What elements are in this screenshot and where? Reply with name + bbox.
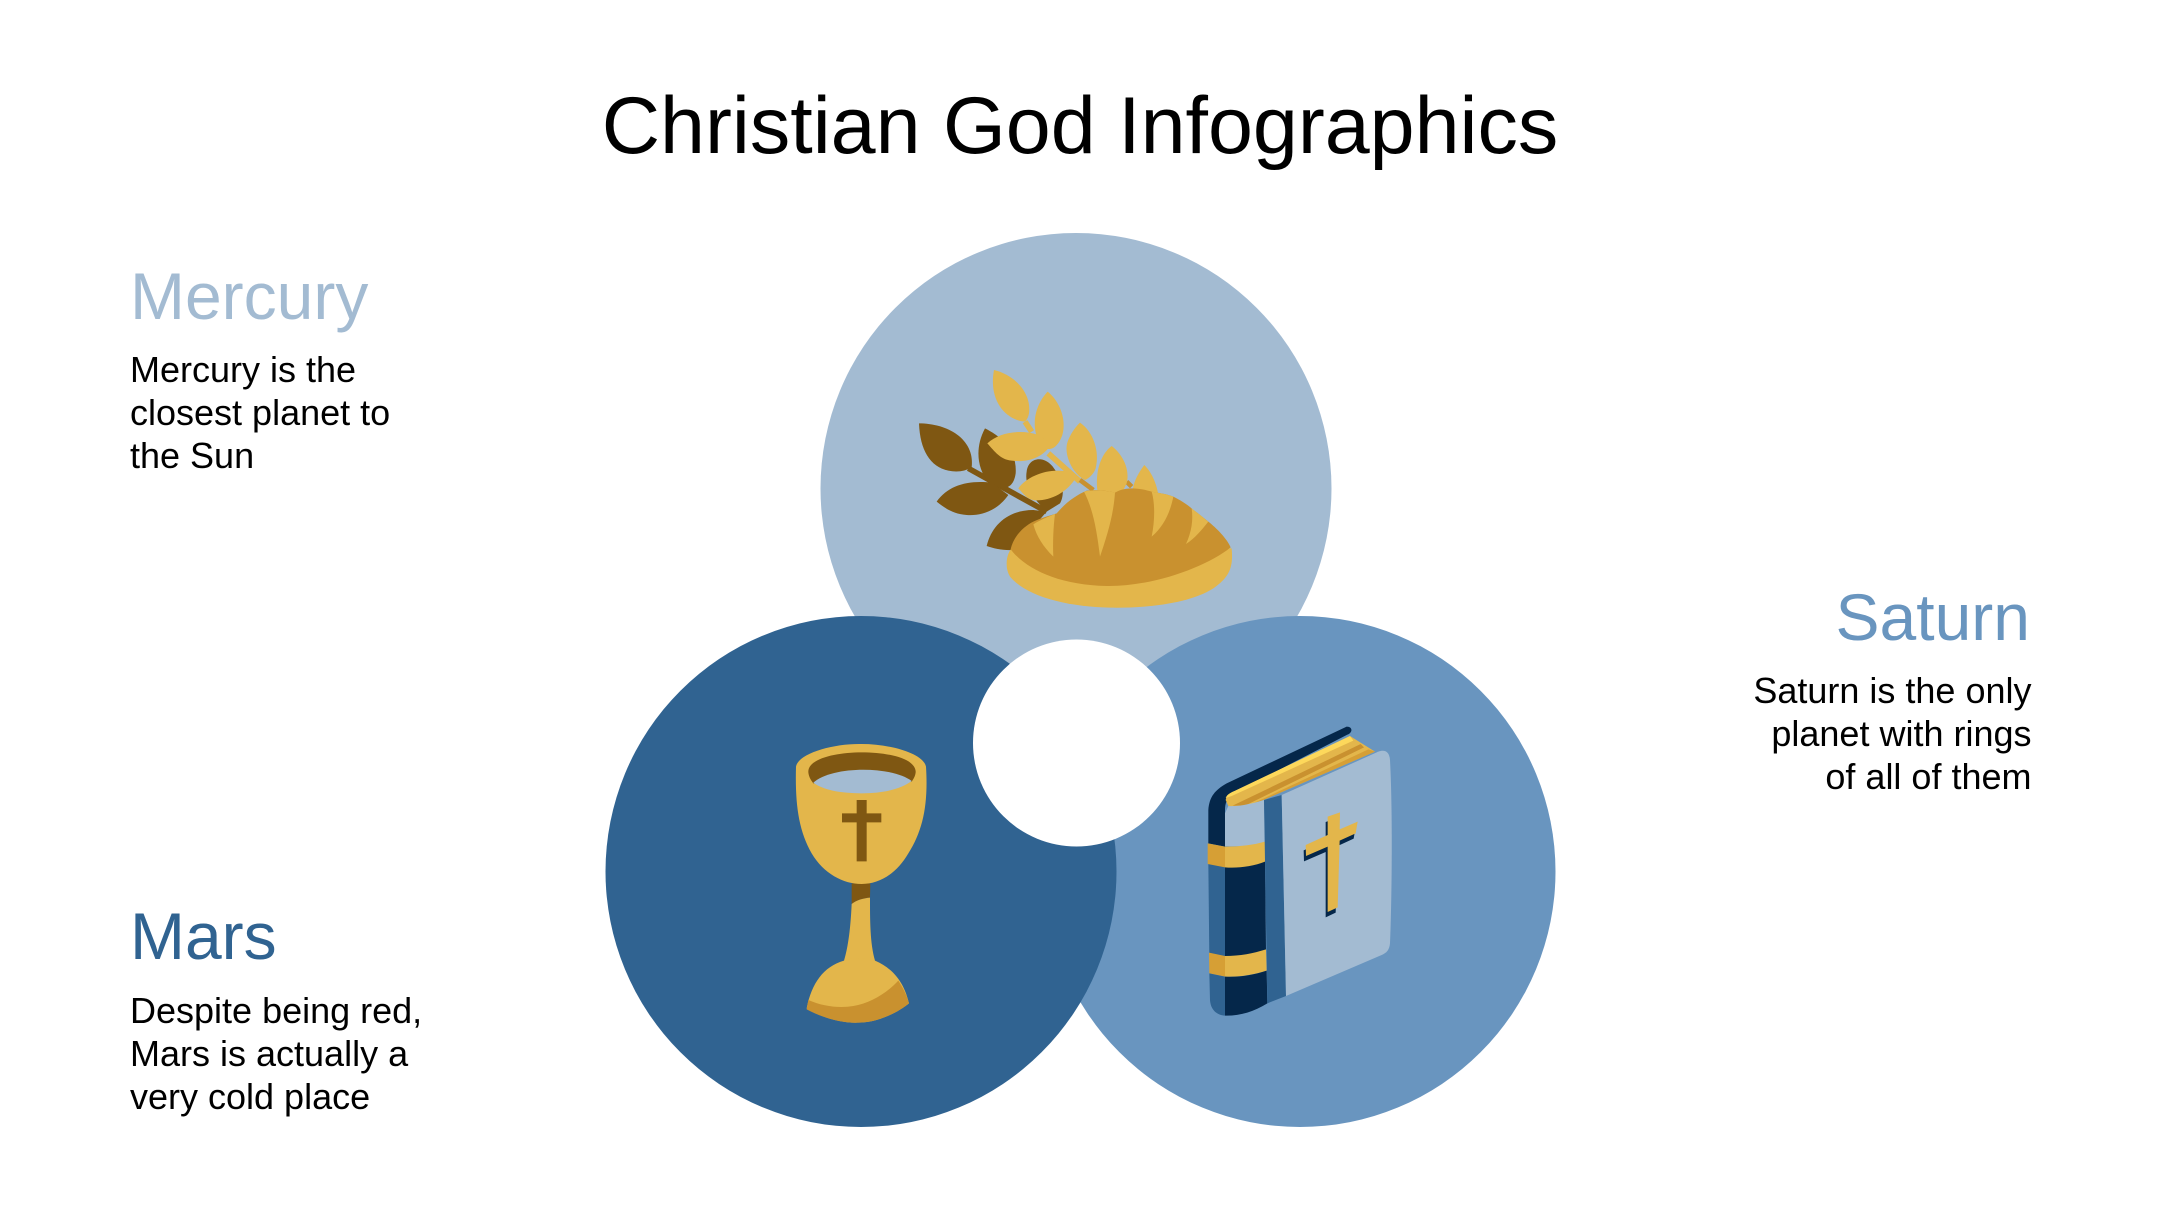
circle: top — [820, 233, 1332, 744]
text block: Saturn: Saturn is the only — [1753, 670, 2032, 711]
title: Christian God Infographics — [602, 81, 1558, 171]
text block: Saturn — [1753, 580, 2032, 797]
text block: Mars: Mars is actually a — [130, 1033, 409, 1074]
text block: Saturn: of all of them — [1825, 756, 2032, 797]
text block: Mercury: Mercury is the — [130, 349, 356, 390]
text block: Mars: Despite being red, — [130, 990, 422, 1031]
circle: centre white — [973, 640, 1180, 846]
text block: Saturn: planet with rings — [1771, 713, 2032, 754]
icon: chalice — [796, 744, 927, 1023]
circle: left — [606, 616, 1116, 1127]
text block: Mars: very cold place — [130, 1076, 370, 1117]
text block: Saturn: Saturn — [1836, 580, 2030, 654]
icon: bread and wheat — [919, 370, 1232, 608]
text block: Mars — [130, 899, 422, 1117]
circle: right — [1044, 616, 1556, 1127]
text block: Mercury — [130, 259, 390, 476]
text block: Mercury: the Sun — [130, 435, 254, 476]
text block: Mars: Mars — [130, 899, 277, 973]
icon: bible — [1208, 727, 1392, 1016]
text block: Mercury: closest planet to — [130, 392, 390, 433]
text block: Mercury: Mercury — [130, 259, 368, 333]
